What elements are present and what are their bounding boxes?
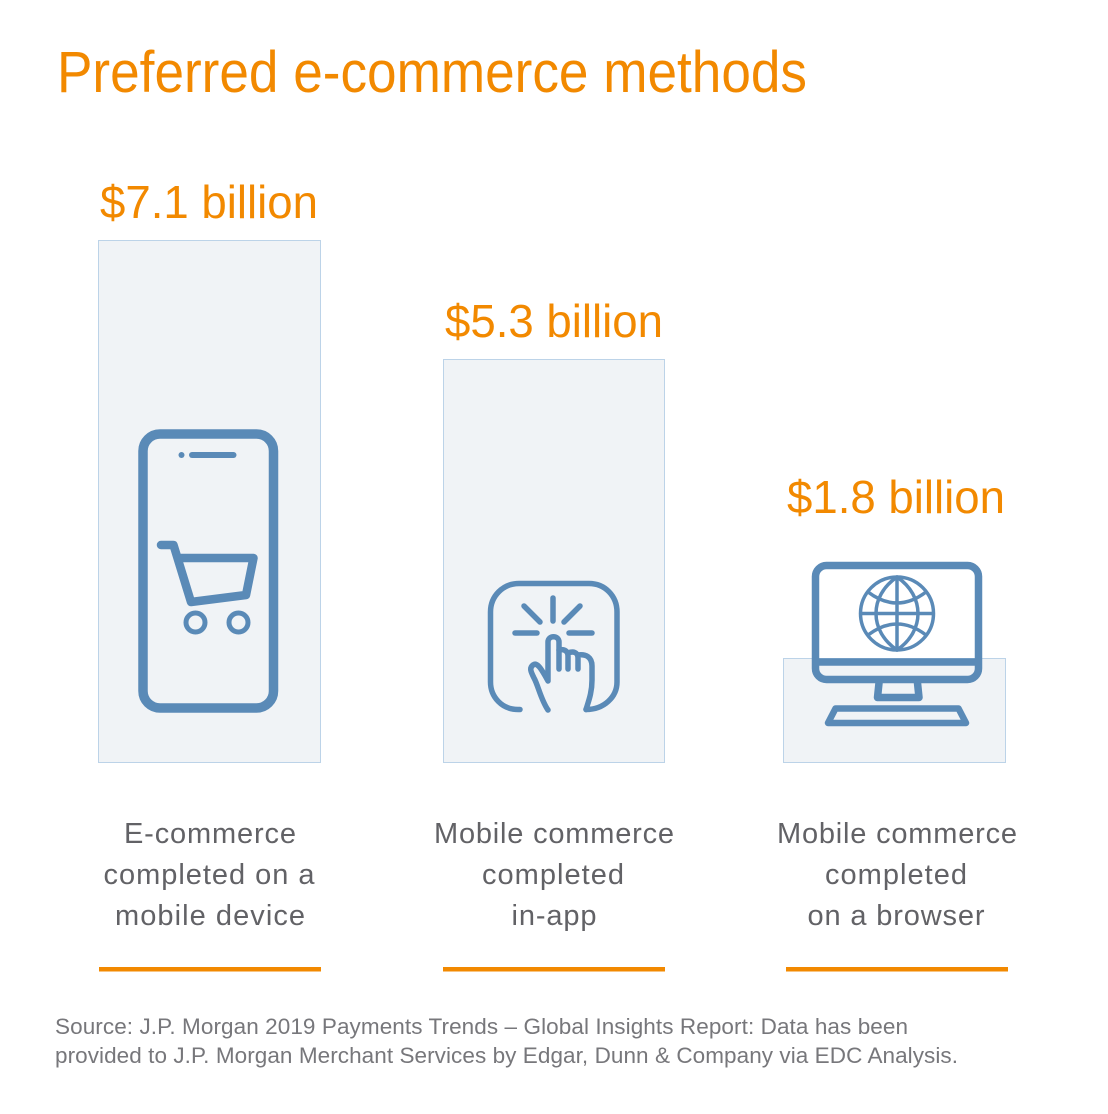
source note: provided to J.P. Morgan Merchant Services by Edgar, Dunn & Company via EDC Analysis. bbox=[55, 1043, 958, 1068]
value: $7.1 billion: $7.1 billion bbox=[100, 176, 318, 228]
label: mobile device bbox=[115, 900, 305, 932]
bar: $5.3 billion bbox=[444, 360, 664, 762]
icon: smartphone with shopping cart bbox=[143, 434, 274, 708]
underline bbox=[99, 967, 321, 972]
label bbox=[777, 818, 1017, 932]
column: mobile commerce in-app bbox=[434, 295, 674, 972]
label: in-app bbox=[512, 900, 596, 932]
label: completed on a bbox=[104, 859, 315, 891]
column: mobile commerce on a browser bbox=[777, 471, 1017, 972]
source note bbox=[55, 1014, 958, 1068]
label: completed bbox=[482, 859, 624, 891]
icon: desktop monitor with globe bbox=[816, 566, 978, 723]
label bbox=[434, 818, 674, 932]
bar: $1.8 billion bbox=[784, 658, 1006, 762]
title: Preferred e-commerce methods bbox=[57, 40, 807, 105]
value: $5.3 billion: $5.3 billion bbox=[445, 295, 663, 347]
label: E-commerce bbox=[124, 818, 296, 850]
icon: finger tapping bbox=[490, 584, 617, 710]
label: on a browser bbox=[808, 900, 985, 932]
label: Mobile commerce bbox=[434, 818, 674, 850]
label bbox=[104, 818, 315, 932]
label: Mobile commerce bbox=[777, 818, 1017, 850]
source note: Source: J.P. Morgan 2019 Payments Trends – Global Insights Report: Data has been bbox=[55, 1014, 908, 1039]
bar: $7.1 billion bbox=[98, 240, 320, 762]
underline bbox=[786, 967, 1008, 972]
column: e-commerce on mobile device bbox=[98, 176, 321, 972]
value: $1.8 billion: $1.8 billion bbox=[787, 471, 1005, 523]
underline bbox=[443, 967, 665, 972]
label: completed bbox=[825, 859, 967, 891]
